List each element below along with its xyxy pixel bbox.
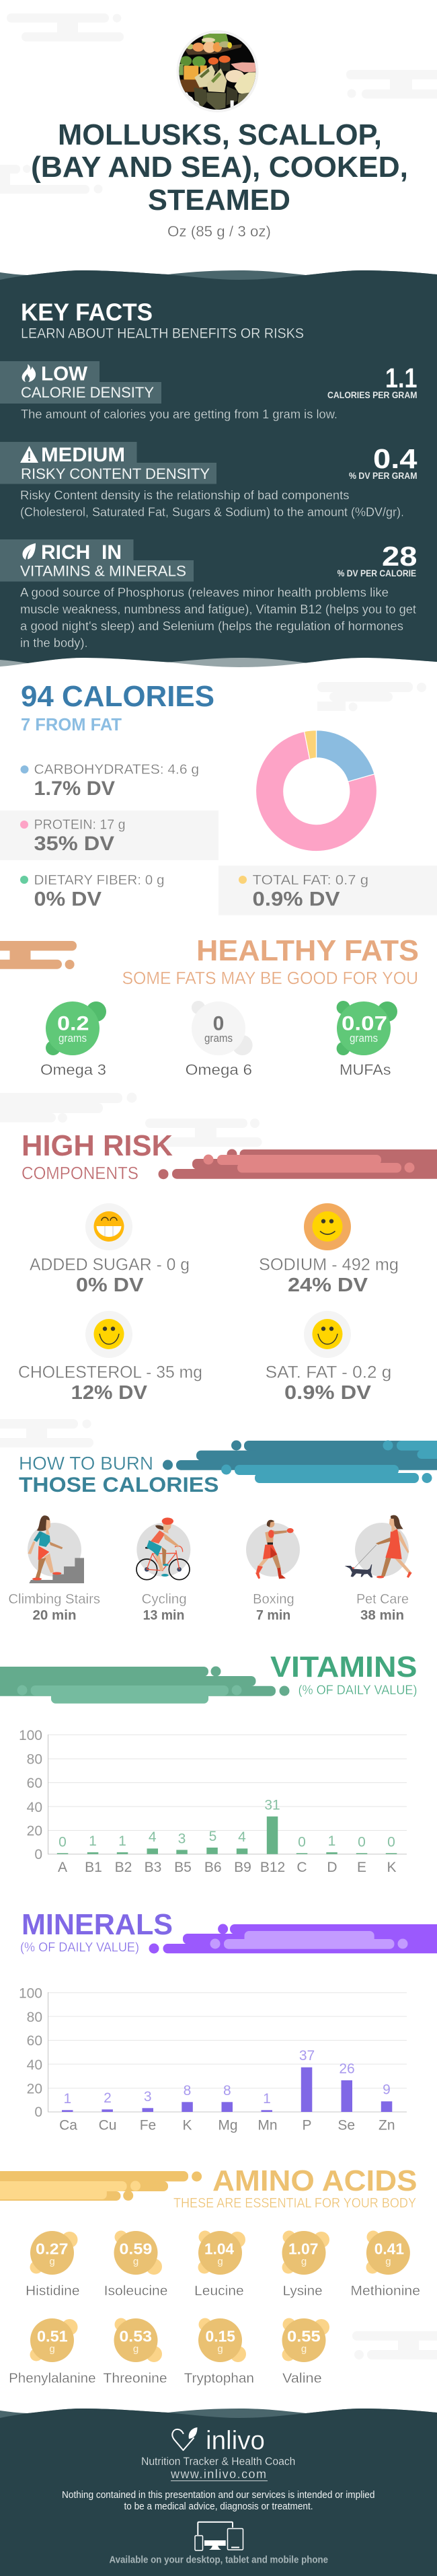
- omega 6: Omega 6: [186, 1061, 252, 1078]
- lysine: g: [301, 2256, 307, 2267]
- leucine: Leucine: [194, 2284, 244, 2299]
- bar chart: minerals: Ca: [59, 2118, 77, 2133]
- activity: pet care: Pet Care: [356, 1592, 409, 1607]
- mufas: MUFAs: [340, 1061, 391, 1078]
- bar chart: vitamins: 100: [19, 1728, 42, 1743]
- icon: inlivo heart logo: [172, 2427, 198, 2450]
- bar chart: vitamins: 1: [89, 1833, 97, 1849]
- panel: minerals: [19, 1909, 437, 2133]
- calorie density block: The amount of calories you are getting from 1 gram is low.: [21, 408, 337, 421]
- mufas: 0.07: [342, 1013, 387, 1035]
- icon: woman climbing stairs: [28, 1515, 84, 1583]
- activity: pet care: 38 min: [360, 1608, 404, 1623]
- saturated fat: [266, 1311, 391, 1404]
- icon: devices: [195, 2522, 243, 2550]
- vitamins and minerals block: VITAMINS & MINERALS: [20, 562, 186, 580]
- sodium: 24% DV: [288, 1275, 368, 1296]
- title: [31, 119, 408, 217]
- phenylalanine: g: [49, 2343, 55, 2355]
- bar chart: vitamins: B1: [85, 1860, 102, 1875]
- bar chart: minerals: 9: [383, 2082, 391, 2097]
- dietary fiber: 0% DV: [34, 888, 102, 911]
- vitamins and minerals block: muscle weakness, numbness and fatigue), Vitamin B12 (helps you to get: [20, 603, 416, 616]
- bar chart: vitamins: B3: [145, 1860, 161, 1875]
- methionine: 0.41: [374, 2240, 404, 2258]
- activity: boxing: Boxing: [253, 1592, 294, 1607]
- bar chart: vitamins: B12: [260, 1860, 285, 1875]
- bar chart: minerals: Cu: [99, 2118, 116, 2133]
- bar chart: vitamins: 4: [149, 1829, 157, 1845]
- bar chart: vitamins: [19, 1728, 407, 1875]
- added sugar: 0% DV: [76, 1275, 144, 1296]
- title: MOLLUSKS, SCALLOP,: [58, 119, 382, 151]
- bar chart: vitamins: 31: [264, 1798, 280, 1813]
- decorative swoosh: [0, 941, 77, 969]
- total fat: TOTAL FAT: 0.7 g: [253, 873, 368, 888]
- lysine: [282, 2230, 329, 2299]
- subheading: (% OF DAILY VALUE): [20, 1940, 139, 1955]
- bar chart: minerals: Se: [337, 2118, 355, 2133]
- histidine: 0.27: [36, 2240, 69, 2258]
- omega 3: 0.2: [57, 1013, 89, 1035]
- bar chart: vitamins: 0: [387, 1835, 395, 1850]
- bar chart: minerals: 26: [339, 2061, 355, 2077]
- bar chart: vitamins: E: [357, 1860, 366, 1875]
- bar chart: minerals: 20: [27, 2082, 42, 2097]
- icon: warning triangle: [20, 446, 38, 463]
- total fat: [218, 866, 437, 915]
- calorie density block: [0, 361, 417, 421]
- risky content block: Risky Content density is the relationship of bad components: [20, 488, 350, 502]
- brand name: inlivo: [206, 2426, 265, 2455]
- carbohydrates: CARBOHYDRATES: 4.6 g: [34, 763, 199, 778]
- tryptophan: [184, 2318, 254, 2386]
- serving size: Oz (85 g / 3 oz): [167, 223, 271, 240]
- decorative swoosh: [0, 1667, 289, 1704]
- bar chart: minerals: 1: [63, 2091, 71, 2107]
- availability note: Available on your desktop, tablet and mobile phone: [109, 2554, 328, 2566]
- bar chart: vitamins: C: [296, 1860, 307, 1875]
- icon: flame: [22, 365, 36, 382]
- disclaimer: to be a medical advice, diagnosis or treatment.: [124, 2501, 313, 2512]
- bar chart: vitamins: B5: [174, 1860, 192, 1875]
- icon: woman walking dog: [345, 1515, 412, 1578]
- disclaimer: [62, 2490, 375, 2512]
- icon: leaf: [22, 543, 36, 560]
- activity: climbing stairs: [8, 1515, 100, 1623]
- bar chart: vitamins: A: [58, 1860, 67, 1875]
- bar chart: vitamins: 0: [58, 1835, 67, 1850]
- added sugar: ADDED SUGAR - 0 g: [30, 1256, 190, 1275]
- decorative swoosh: [0, 2171, 202, 2201]
- bar chart: vitamins: 3: [178, 1831, 186, 1847]
- bar chart: vitamins: 1: [118, 1833, 126, 1849]
- heading line 1: HOW TO BURN: [19, 1453, 153, 1474]
- icon: man boxing: [246, 1520, 300, 1579]
- bar chart: vitamins: 0: [34, 1847, 42, 1862]
- title: (BAY AND SEA), COOKED,: [31, 151, 408, 184]
- bar chart: vitamins: 20: [27, 1823, 42, 1839]
- panel: calories: [0, 681, 437, 915]
- cholesterol: 12% DV: [71, 1382, 148, 1404]
- decorative swoosh: [163, 1441, 437, 1483]
- tryptophan: Tryptophan: [184, 2372, 254, 2386]
- bar chart: vitamins: 60: [27, 1776, 42, 1791]
- activity: boxing: 7 min: [256, 1608, 290, 1623]
- dietary fiber: [20, 873, 165, 911]
- omega 6: [186, 1001, 253, 1078]
- bar chart: minerals: 37: [299, 2048, 315, 2063]
- isoleucine: [104, 2230, 168, 2299]
- phenylalanine: 0.51: [37, 2328, 68, 2345]
- added sugar: [30, 1203, 190, 1296]
- calorie density block: 1.1: [385, 363, 417, 393]
- leucine: [194, 2230, 245, 2299]
- omega 3: [40, 1001, 106, 1078]
- methionine: g: [385, 2256, 391, 2267]
- food photo: [176, 30, 258, 112]
- sodium: SODIUM - 492 mg: [259, 1256, 399, 1275]
- calorie density block: CALORIES PER GRAM: [327, 390, 417, 400]
- valine: Valine: [282, 2372, 322, 2386]
- bar chart: minerals: 8: [184, 2083, 191, 2098]
- risky content block: MEDIUM: [41, 444, 125, 466]
- bar chart: vitamins: 0: [358, 1835, 366, 1850]
- omega 6: grams: [204, 1032, 233, 1045]
- cholesterol: CHOLESTEROL - 35 mg: [18, 1363, 202, 1382]
- sodium: [259, 1203, 399, 1296]
- bar chart: minerals: 40: [27, 2057, 42, 2073]
- histidine: [26, 2231, 79, 2299]
- risky content block: 0.4: [373, 443, 418, 474]
- calorie density block: LOW: [41, 363, 88, 385]
- calories heading: 94 CALORIES: [21, 681, 214, 713]
- bar chart: vitamins: 0: [298, 1835, 306, 1850]
- saturated fat: 0.9% DV: [284, 1382, 372, 1404]
- bar chart: vitamins: 1: [328, 1833, 335, 1849]
- calories from fat: 7 FROM FAT: [21, 716, 122, 734]
- activity: cycling: 13 min: [143, 1608, 184, 1623]
- protein: 35% DV: [34, 833, 114, 855]
- panel: amino acids: [0, 2165, 420, 2386]
- bar chart: minerals: 2: [104, 2090, 112, 2106]
- tagline: Nutrition Tracker & Health Coach: [141, 2455, 295, 2468]
- isoleucine: Isoleucine: [104, 2284, 168, 2299]
- bar chart: minerals: 80: [27, 2010, 42, 2025]
- key facts heading: KEY FACTS: [21, 299, 153, 326]
- panel: footer: [0, 2409, 437, 2576]
- bar chart: vitamins: 5: [209, 1829, 216, 1844]
- bar chart: minerals: Fe: [140, 2118, 156, 2133]
- heading: HIGH RISK: [22, 1130, 173, 1162]
- carbohydrates: 1.7% DV: [34, 778, 115, 800]
- panel: high risk components: [18, 1130, 437, 1404]
- activity: cycling: [136, 1517, 190, 1623]
- phenylalanine: [9, 2318, 96, 2386]
- histidine: Histidine: [26, 2284, 79, 2299]
- activity: boxing: [246, 1520, 300, 1623]
- subheading: (% OF DAILY VALUE): [299, 1683, 417, 1698]
- vitamins and minerals block: % DV PER CALORIE: [337, 568, 416, 578]
- title: STEAMED: [148, 184, 290, 217]
- panel: key facts: [0, 270, 437, 667]
- leucine: g: [217, 2256, 223, 2267]
- tryptophan: g: [217, 2343, 223, 2355]
- vitamins and minerals block: a good night's sleep) and Selenium (helps the regulation of hormones: [20, 619, 403, 633]
- threonine: [103, 2318, 167, 2386]
- threonine: Threonine: [103, 2372, 167, 2386]
- valine: g: [301, 2343, 307, 2355]
- protein: PROTEIN: 17 g: [34, 818, 125, 833]
- bar chart: minerals: 60: [27, 2033, 42, 2049]
- calorie density block: CALORIE DENSITY: [21, 384, 154, 401]
- saturated fat: SAT. FAT - 0.2 g: [266, 1363, 391, 1382]
- bar chart: minerals: 1: [263, 2091, 271, 2107]
- mufas: grams: [350, 1032, 378, 1045]
- subheading: COMPONENTS: [22, 1164, 138, 1183]
- tryptophan: 0.15: [206, 2328, 235, 2345]
- isoleucine: g: [133, 2256, 138, 2267]
- lysine: Lysine: [283, 2284, 323, 2299]
- vitamins and minerals block: 28: [382, 541, 417, 572]
- heading: AMINO ACIDS: [212, 2165, 417, 2197]
- risky content block: [0, 442, 418, 519]
- icon: woman cycling: [136, 1517, 190, 1580]
- valine: [282, 2318, 329, 2386]
- heading line 2: THOSE CALORIES: [19, 1472, 218, 1497]
- heading: VITAMINS: [270, 1651, 417, 1683]
- threonine: 0.53: [119, 2328, 152, 2345]
- vitamins and minerals block: [0, 539, 417, 650]
- subheading: SOME FATS MAY BE GOOD FOR YOU: [122, 969, 418, 988]
- decorative swoosh: [149, 1924, 437, 1953]
- bar chart: vitamins: B2: [115, 1860, 132, 1875]
- methionine: [350, 2230, 420, 2299]
- vitamins and minerals block: in the body).: [20, 636, 88, 650]
- bar chart: minerals: 100: [19, 1986, 42, 2002]
- bar chart: minerals: 0: [34, 2105, 42, 2120]
- activity: climbing stairs: Climbing Stairs: [8, 1592, 100, 1607]
- heading: HEALTHY FATS: [196, 935, 419, 967]
- omega 3: Omega 3: [40, 1061, 106, 1078]
- bar chart: vitamins: D: [327, 1860, 337, 1875]
- lysine: 1.07: [288, 2240, 318, 2258]
- bar chart: vitamins: 4: [238, 1829, 246, 1845]
- key facts subheading: LEARN ABOUT HEALTH BENEFITS OR RISKS: [21, 326, 304, 342]
- activity: climbing stairs: 20 min: [32, 1608, 77, 1623]
- omega 3: grams: [58, 1032, 87, 1045]
- protein: [0, 810, 218, 860]
- heading: MINERALS: [22, 1909, 173, 1941]
- isoleucine: 0.59: [119, 2240, 152, 2258]
- bar chart: minerals: K: [182, 2118, 192, 2133]
- subheading: THESE ARE ESSENTIAL FOR YOUR BODY: [173, 2196, 416, 2211]
- bar chart: minerals: Mg: [218, 2118, 238, 2133]
- bar chart: vitamins: 40: [27, 1800, 42, 1815]
- risky content block: % DV PER GRAM: [349, 471, 417, 481]
- risky content block: (Cholesterol, Saturated Fat, Sugars & Sodium) to the amount (%DV/gr).: [20, 505, 404, 519]
- valine: 0.55: [287, 2328, 321, 2345]
- bar chart: minerals: P: [302, 2118, 312, 2133]
- activity: pet care: [345, 1515, 412, 1623]
- activity: cycling: Cycling: [142, 1592, 187, 1607]
- website: www.inlivo.com: [170, 2468, 266, 2481]
- panel: healthy fats: [0, 935, 419, 1078]
- histidine: g: [49, 2256, 55, 2267]
- disclaimer: Nothing contained in this presentation and our services is intended or implied: [62, 2490, 375, 2501]
- bar chart: minerals: 8: [223, 2083, 231, 2098]
- mufas: [337, 1001, 397, 1078]
- bar chart: minerals: Zn: [379, 2118, 395, 2133]
- bar chart: vitamins: B6: [204, 1860, 222, 1875]
- carbohydrates: [20, 763, 199, 800]
- leucine: 1.04: [204, 2240, 234, 2258]
- panel: vitamins: [0, 1651, 417, 1875]
- donut chart: [255, 730, 376, 851]
- total fat: 0.9% DV: [253, 888, 340, 911]
- bar chart: minerals: [19, 1986, 407, 2133]
- vitamins and minerals block: RICH IN: [41, 541, 122, 564]
- bar chart: vitamins: K: [387, 1860, 397, 1875]
- cholesterol: [18, 1311, 202, 1404]
- phenylalanine: Phenylalanine: [9, 2372, 96, 2386]
- bar chart: minerals: Mn: [257, 2118, 278, 2133]
- panel: how to burn calories: [8, 1441, 437, 1623]
- threonine: g: [133, 2343, 138, 2355]
- bar chart: minerals: 3: [144, 2089, 152, 2105]
- bar chart: vitamins: B9: [234, 1860, 251, 1875]
- bar chart: vitamins: 80: [27, 1752, 42, 1768]
- dietary fiber: DIETARY FIBER: 0 g: [34, 873, 165, 888]
- omega 6: 0: [213, 1013, 224, 1035]
- methionine: Methionine: [350, 2284, 420, 2299]
- risky content block: RISKY CONTENT DENSITY: [21, 465, 210, 482]
- vitamins and minerals block: A good source of Phosphorus (releaves minor health problems like: [20, 586, 389, 599]
- decorative swoosh: [159, 1149, 437, 1179]
